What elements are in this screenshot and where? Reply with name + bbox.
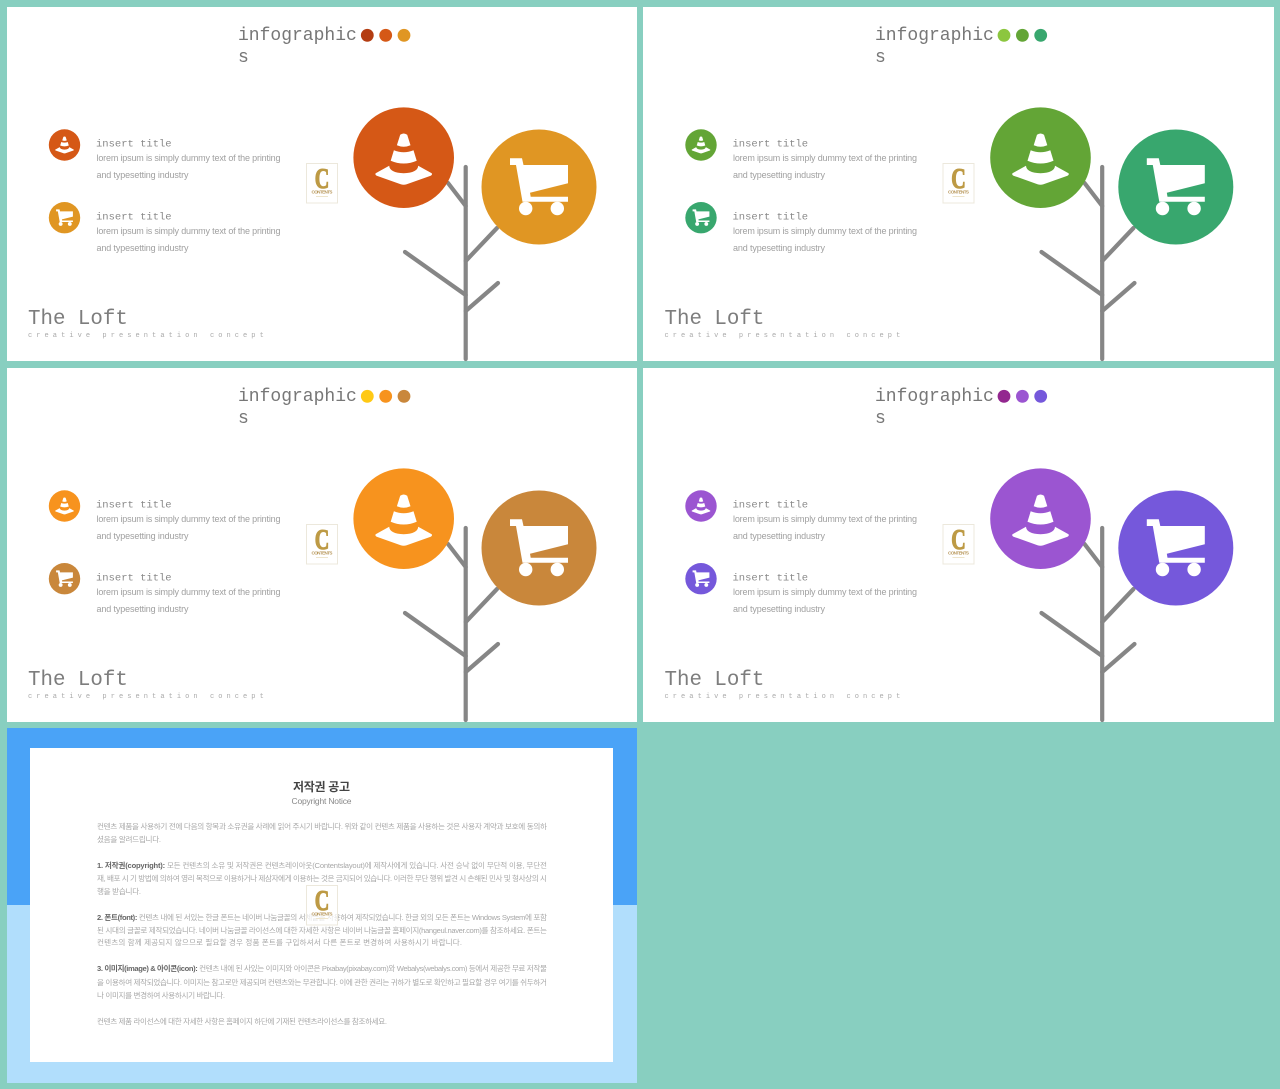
brand: creative presentation concept <box>28 332 268 340</box>
tree <box>405 167 498 359</box>
brand: creative presentation concept <box>664 693 904 701</box>
heading: s <box>238 409 249 429</box>
heading <box>875 26 994 68</box>
list item: cone: insert title <box>732 138 808 150</box>
watermark: C <box>951 164 966 195</box>
list item: cart <box>685 202 917 253</box>
watermark <box>306 886 338 925</box>
circle: cart <box>1118 490 1233 606</box>
list item: cone: and typesetting industry <box>96 170 189 180</box>
list item: cart: lorem ipsum is simply dummy text of the printing <box>96 587 280 597</box>
intro paragraph <box>97 821 547 844</box>
watermark: CONTENTS <box>312 550 332 556</box>
brand: creative presentation concept <box>28 693 268 701</box>
list item: cone: and typesetting industry <box>733 170 826 180</box>
list item: cone: lorem ipsum is simply dummy text of the printing <box>733 153 917 163</box>
copyright title: Copyright Notice <box>292 796 352 806</box>
panel: green infographic slide <box>643 7 1274 361</box>
copyright title <box>292 779 352 806</box>
header colour dots <box>361 29 410 42</box>
section 1 copyright: 재, 배포 시 기 방법에 의하여 영리 목적으로 이용하거나 제삼자에게 이용하는 것은 금지되어 있습니다. 이러한 무단 행위 발견 시 손해된 민사 및 형사상의 시 <box>97 873 547 883</box>
closing line: 컨텐츠 제품 라이선스에 대한 자세한 사항은 홈페이지 하단에 기재된 컨텐츠라이선스를 참조하세요. <box>97 1016 387 1026</box>
section 3 image and icon: 나 이미지를 변경하여 사용하시기 바랍니다. <box>97 990 225 1000</box>
list item: cart: lorem ipsum is simply dummy text of the printing <box>733 587 917 597</box>
heading <box>238 26 357 68</box>
brand: The Loft <box>664 669 764 692</box>
watermark: CONTENTS <box>312 912 332 916</box>
list item: cone <box>685 490 917 541</box>
watermark: CONTENTS <box>948 550 969 556</box>
header colour dots <box>361 390 410 403</box>
list item: cart: and typesetting industry <box>733 243 826 253</box>
heading: infographic <box>238 26 357 46</box>
copyright title: 저작권 공고 <box>293 779 350 794</box>
panel: purple infographic slide <box>643 368 1274 722</box>
circle: cone <box>990 468 1091 569</box>
list item: cone <box>49 129 280 180</box>
circle: cone <box>353 468 454 569</box>
brand: creative presentation concept <box>664 332 904 340</box>
brand <box>28 308 268 340</box>
heading: s <box>875 409 886 429</box>
watermark <box>943 524 974 564</box>
watermark: C <box>315 164 329 195</box>
heading: infographic <box>875 26 994 46</box>
circle: cart <box>482 490 596 606</box>
tree <box>1042 167 1134 359</box>
list item: cart: insert title <box>96 572 172 584</box>
section 3 image and icon: 을 이용하여 제작되었습니다. 이미지는 참고로만 제공되며 컨텐츠와는 무관합니다. 이에 관한 권리는 귀하가 별도로 확인하고 필요할 경우 여기를 쉬두하거 <box>97 977 547 987</box>
watermark: CONTENTS <box>948 190 969 194</box>
brand <box>28 669 268 701</box>
watermark <box>306 524 338 564</box>
watermark <box>943 164 974 203</box>
brand: The Loft <box>664 308 764 331</box>
section 2 font: 된 시대의 글꼴로 제작되었습니다. 네이버 나눔글꼴 라이선스에 대한 자세한 사항은 네이버 나눔글꼴 홈페이지(hangeul.naver.com)를 참조하세요. 폰트는 <box>97 925 547 935</box>
section 3 image and icon: 3. 이미지(image) & 아이콘(icon): 컨텐츠 내에 된 사있는 이미지와 아이콘은 Pixabay(pixabay.com)와 Webalys(webalys.com) 등에서 제공한 무료 저작물 <box>97 963 547 973</box>
heading <box>875 387 994 429</box>
list item: cone: insert title <box>96 138 172 150</box>
list item: cart <box>685 563 917 614</box>
list item: cart: and typesetting industry <box>96 604 189 614</box>
panel: orange infographic slide <box>7 7 637 361</box>
list item: cone <box>49 490 280 541</box>
section 1 copyright <box>97 860 547 896</box>
intro paragraph: 컨텐츠 제품을 사용하기 전에 다음의 항목과 소유권을 사례에 읽어 주시기 바랍니다. 위와 같이 컨텐츠 제품을 사용하는 것은 사용자 계약과 보호에 동의하 <box>97 821 547 831</box>
circle: cone <box>990 107 1091 208</box>
list item: cart: lorem ipsum is simply dummy text of the printing <box>96 226 280 236</box>
list item: cart <box>49 202 280 253</box>
section 3 image and icon <box>97 963 547 1000</box>
section 2 font: 컨텐츠의 함께 제공되지 않으므로 필요할 경우 정품 폰트를 구입하셔서 다른 폰트로 변경하여 사용하시기 바랍니다. <box>97 937 462 947</box>
header colour dots <box>998 390 1047 403</box>
watermark: CONTENTS <box>312 190 332 194</box>
brand <box>664 669 904 701</box>
watermark: C <box>315 525 329 556</box>
list item: cone: and typesetting industry <box>733 531 826 541</box>
list item: cone: lorem ipsum is simply dummy text of the printing <box>96 153 280 163</box>
section 2 font <box>97 912 547 947</box>
heading: infographic <box>875 387 994 407</box>
watermark: C <box>951 525 966 556</box>
section 2 font: 2. 폰트(font): 컨텐츠 내에 된 서있는 한글 폰트는 네이버 나눔글꼴의 서체들을 사용하여 제작되었습니다. 한글 외의 모든 폰트는 Windows System에 포함 <box>97 912 547 922</box>
heading: infographic <box>238 387 357 407</box>
watermark: C <box>315 886 329 917</box>
brand: The Loft <box>28 308 128 331</box>
brand: The Loft <box>28 669 128 692</box>
heading <box>238 387 357 429</box>
watermark <box>306 164 338 203</box>
header colour dots <box>998 29 1047 42</box>
list item: cart: insert title <box>732 212 808 224</box>
circle: cone <box>353 107 454 208</box>
list item: cone: and typesetting industry <box>96 531 189 541</box>
heading: s <box>238 48 249 68</box>
list item: cart: insert title <box>96 212 172 224</box>
list item: cart: insert title <box>732 572 808 584</box>
intro paragraph: 셨음을 알려드립니다. <box>97 834 161 844</box>
list item: cone: insert title <box>96 500 172 512</box>
circle: cart <box>482 130 596 244</box>
panel: amber infographic slide <box>7 368 637 722</box>
list item: cone: lorem ipsum is simply dummy text of the printing <box>96 514 280 524</box>
tree <box>1042 528 1134 720</box>
list item: cone <box>685 129 917 180</box>
list item: cart <box>49 563 280 614</box>
brand <box>664 308 904 340</box>
circle: cart <box>1118 130 1233 244</box>
list item: cart: and typesetting industry <box>96 243 189 253</box>
section 1 copyright: 1. 저작권(copyright): 모든 컨텐츠의 소유 및 저작권은 컨텐츠레이아웃(Contentslayout)에 제작사에게 있습니다. 사전 승낙 없이 무단적 이용, 무단전 <box>97 860 547 870</box>
list item: cart: lorem ipsum is simply dummy text of the printing <box>733 226 917 236</box>
heading: s <box>875 48 886 68</box>
panel: copyright notice <box>7 728 637 1083</box>
list item: cone: insert title <box>732 500 808 512</box>
tree <box>405 528 498 720</box>
list item: cone: lorem ipsum is simply dummy text of the printing <box>733 514 917 524</box>
section 1 copyright: 행을 받습니다. <box>97 886 141 896</box>
list item: cart: and typesetting industry <box>733 604 826 614</box>
